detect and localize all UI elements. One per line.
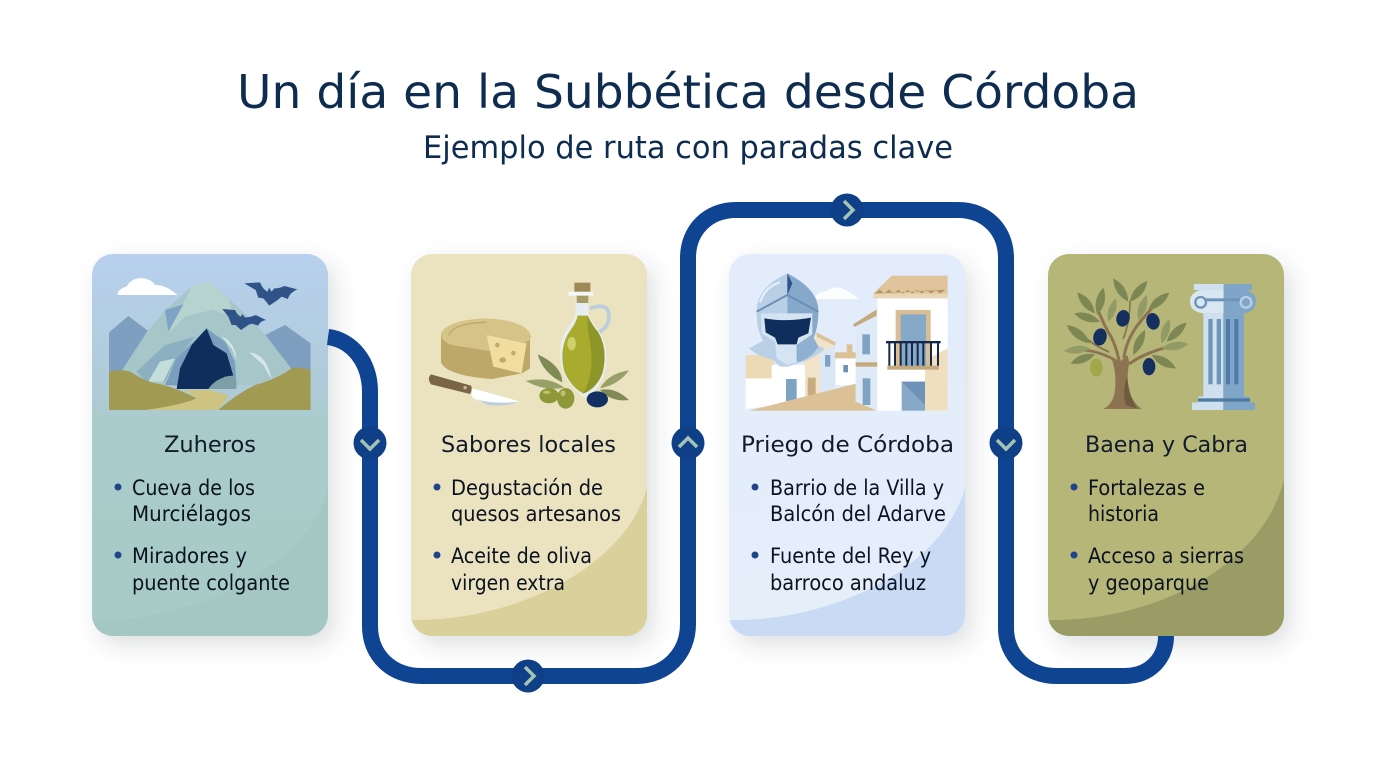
arrow node: down 2: [990, 426, 1022, 460]
icon: cheese: [441, 319, 531, 379]
heading: Sabores locales: [441, 432, 616, 458]
heading: Priego de Córdoba: [741, 432, 954, 458]
icon: olives: [539, 388, 608, 409]
icon: oil bottle: [560, 283, 609, 398]
card corner shade: [92, 615, 328, 636]
illustration: cheese, oil and olives: [429, 283, 629, 409]
subtitle: Ejemplo de ruta con paradas clave: [423, 130, 953, 166]
bullet list: Fortalezas e: [1088, 476, 1205, 500]
bullet list: Acceso a sierras: [1088, 544, 1244, 568]
heading: Zuheros: [164, 432, 256, 458]
bullet list: puente colgante: [132, 571, 290, 595]
icon: cloud: [118, 278, 178, 295]
arrow node: up: [672, 426, 704, 460]
bullet list: Degustación de: [451, 476, 603, 500]
panel: Sabores locales: [411, 254, 647, 636]
panel: Zuheros: [92, 254, 328, 636]
icon: knife: [429, 374, 520, 406]
bullet list: y geoparque: [1088, 571, 1209, 595]
heading: Baena y Cabra: [1085, 432, 1248, 458]
card corner shade: [1048, 480, 1284, 636]
icon: bat small: [222, 309, 266, 330]
icon: olive leaves: [526, 354, 629, 400]
bullet list: Fuente del Rey y: [770, 544, 931, 568]
icon: olive tree: [1064, 278, 1188, 409]
arrow node: right 2: [830, 194, 864, 226]
card background: [729, 254, 965, 636]
card corner shade: [729, 488, 965, 636]
card background: [411, 254, 647, 636]
bullet list: [1070, 476, 1244, 595]
title: Un día en la Subbética desde Córdoba: [237, 65, 1139, 119]
bullet list: [752, 476, 946, 595]
icon: helmet: [749, 273, 825, 367]
bullet list: quesos artesanos: [451, 502, 621, 526]
icon: ionic column: [1190, 284, 1256, 410]
panel: Baena y Cabra: [1048, 254, 1284, 636]
illustration: cave and bats: [109, 278, 311, 410]
icon: bat large: [244, 282, 297, 306]
bullet list: [114, 476, 290, 595]
card background: [1048, 254, 1284, 636]
panel: Priego de Córdoba: [729, 254, 965, 636]
village street: [746, 309, 877, 411]
bullet list: Murciélagos: [132, 502, 251, 526]
illustration: helmet and village: [746, 273, 948, 411]
card background: [92, 254, 328, 636]
bullet list: Aceite de oliva: [451, 544, 592, 568]
route path connecting the stops: [328, 210, 1166, 676]
bullet list: historia: [1088, 502, 1159, 526]
bullet list: Cueva de los: [132, 476, 255, 500]
large house: [873, 276, 948, 411]
card corner shade: [411, 488, 647, 636]
bullet list: Balcón del Adarve: [770, 502, 946, 526]
bullet list: Miradores y: [132, 544, 247, 568]
illustration: olive tree and column: [1064, 278, 1256, 410]
bullet list: Barrio de la Villa y: [770, 476, 944, 500]
icon: cloud: [814, 287, 859, 299]
arrow node: right 1: [512, 660, 544, 692]
bullet list: virgen extra: [451, 571, 565, 595]
arrow node: down 1: [354, 426, 386, 460]
bullet list: barroco andaluz: [770, 571, 926, 595]
bullet list: [434, 476, 621, 595]
